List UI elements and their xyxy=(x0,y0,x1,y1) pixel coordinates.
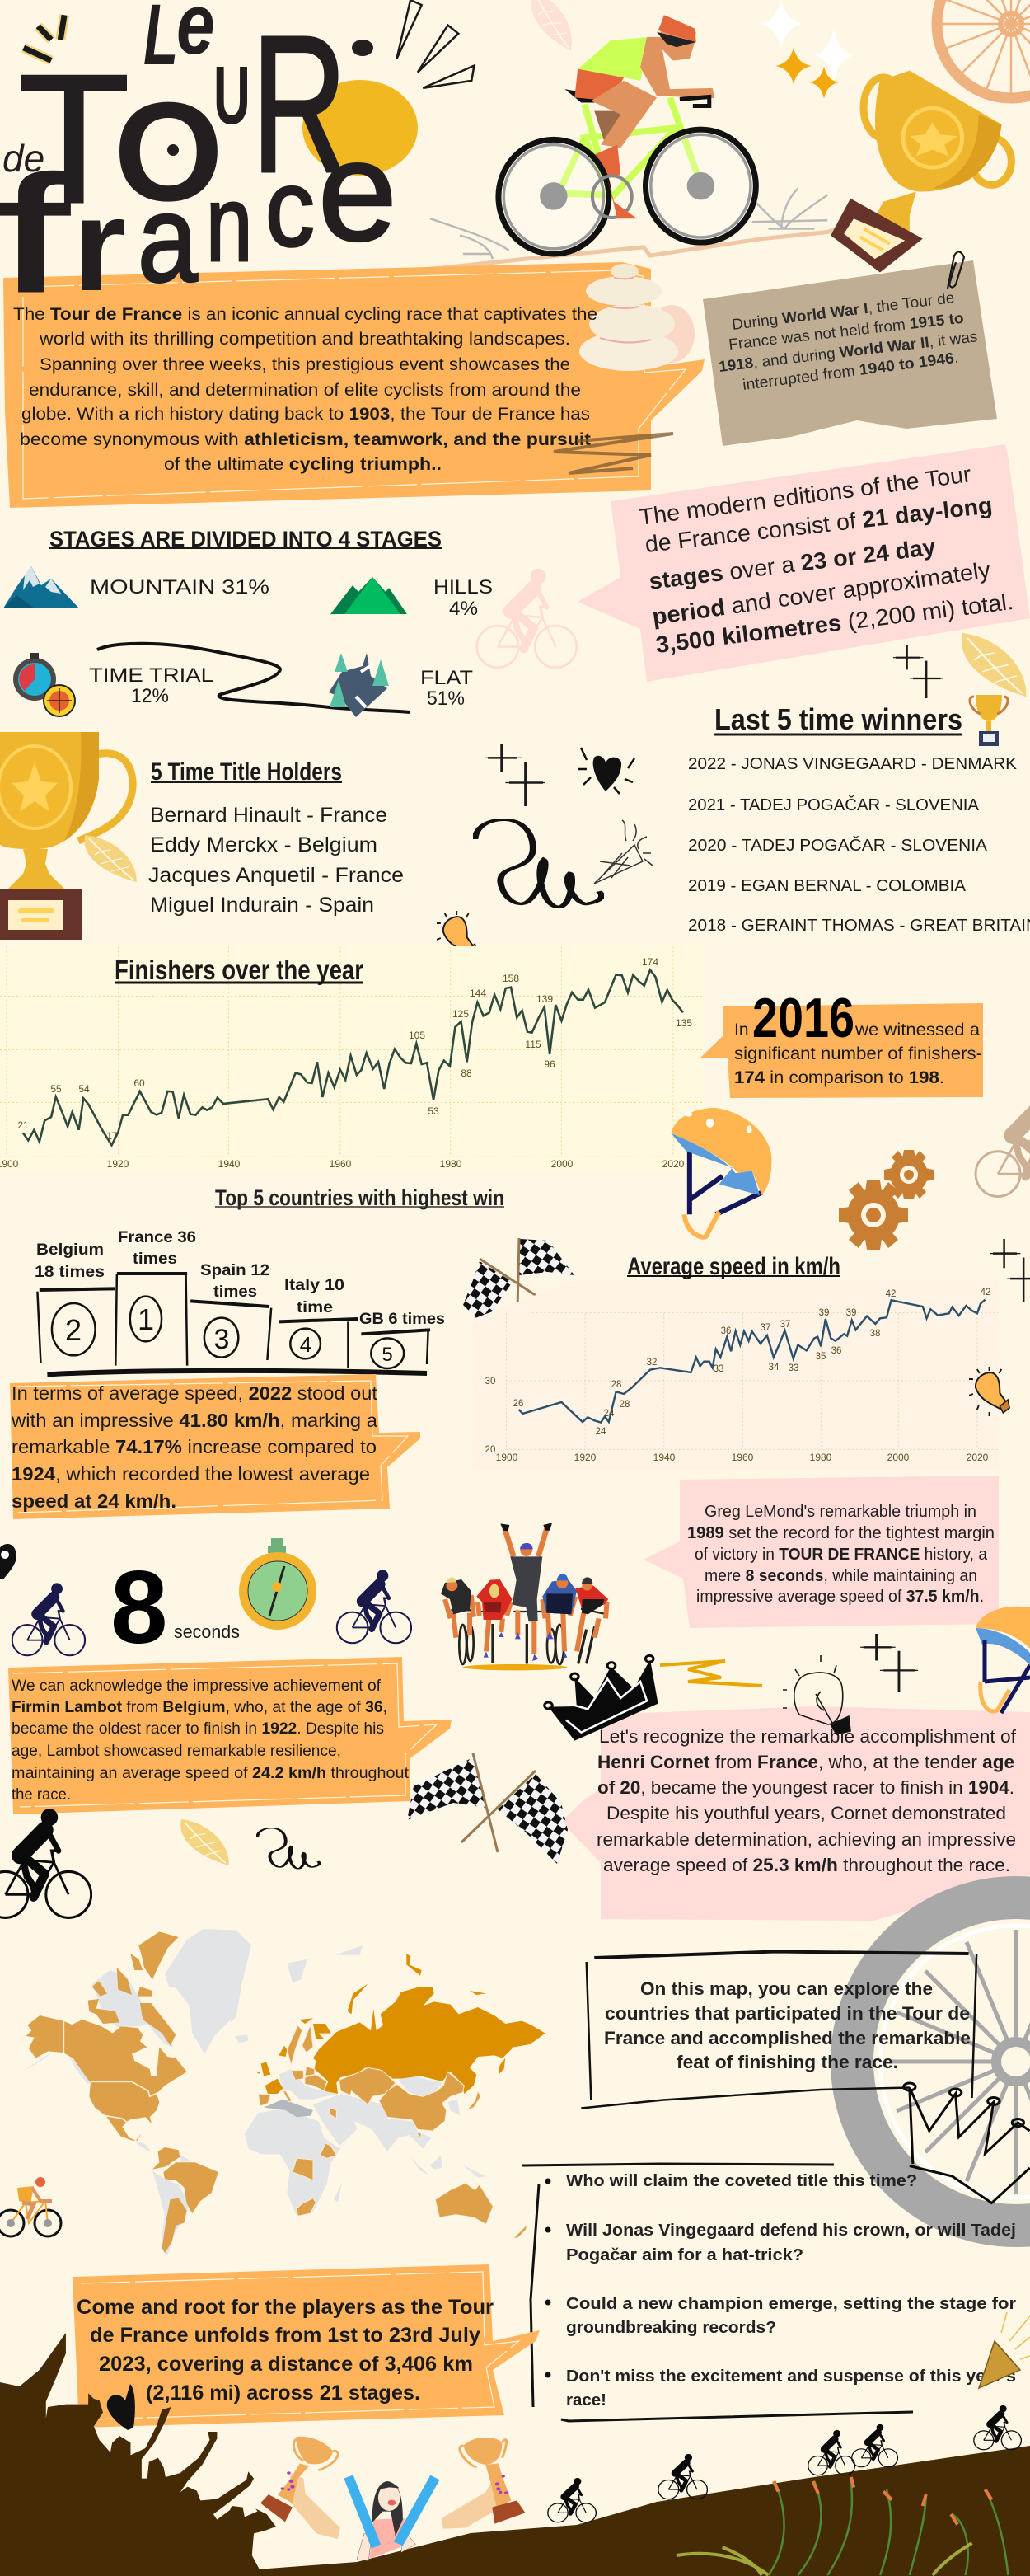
label: time trial: 12% xyxy=(131,685,169,707)
data labels: 55 xyxy=(50,1083,62,1095)
icon: light bulb xyxy=(437,911,476,960)
x axis: 1900 xyxy=(496,1452,518,1463)
intro text: The Tour de France is an iconic annual cycling race that captivates the xyxy=(13,304,597,324)
Cornet text: Henri Cornet from France, who, at the tender age xyxy=(597,1752,1014,1772)
x axis xyxy=(0,1158,685,1170)
podium labels: time xyxy=(297,1299,333,1316)
speed text: speed at 24 km/h. xyxy=(12,1490,176,1512)
Cornet text: average speed of 25.3 km/h throughout the race. xyxy=(603,1855,1010,1875)
illustration: group of cyclists xyxy=(441,1523,608,1670)
data labels: 33 xyxy=(714,1364,723,1374)
panel: Firmin Lambot xyxy=(8,1657,452,1814)
data labels: 28 xyxy=(620,1400,630,1410)
icon: large grey wheel xyxy=(852,1898,1030,2226)
icon: squiggle small xyxy=(257,1828,320,1869)
list: title holders: Eddy Merckx - Belgium xyxy=(150,833,377,856)
callout text: we witnessed a xyxy=(854,1021,980,1039)
modern editions text: period and cover approximately xyxy=(651,557,992,630)
icon: navy cyclist right xyxy=(337,1570,411,1643)
panel: Henri Cornet xyxy=(561,1706,1030,1921)
x axis xyxy=(496,1452,989,1463)
speed text: In terms of average speed, 2022 stood out xyxy=(12,1382,378,1404)
panel: Greg LeMond xyxy=(644,1476,999,1628)
title: France: a xyxy=(138,169,198,307)
callout text xyxy=(604,1978,971,2072)
data labels: 24 xyxy=(596,1427,606,1437)
LeMond text: of victory in TOUR DE FRANCE history, a xyxy=(695,1546,988,1564)
Lambot text xyxy=(12,1677,410,1804)
data labels: 20 xyxy=(485,1445,495,1455)
icon: plus marks xyxy=(860,1634,918,1692)
data labels: 26 xyxy=(513,1399,523,1409)
heading: stages: STAGES ARE DIVIDED INTO 4 STAGES xyxy=(49,527,442,551)
icon: map pin xyxy=(0,1544,16,1579)
dates text: Come and root for the players as the Tour xyxy=(77,2296,494,2319)
icon: black heart xyxy=(107,2384,135,2430)
x axis: 1920 xyxy=(107,1158,129,1170)
data labels xyxy=(17,956,692,1142)
illustration: hero cyclist xyxy=(499,15,756,254)
podium labels: France 36 xyxy=(118,1229,196,1246)
title: Le Tour de: T xyxy=(18,37,130,242)
map: Americas xyxy=(22,1929,251,2256)
list: last winners: 2019 - EGAN BERNAL - COLOMBIA xyxy=(688,876,966,895)
cheering crowd silhouette xyxy=(0,2333,276,2576)
podium labels: times xyxy=(213,1283,257,1301)
icon: gold trophy xyxy=(831,71,1011,272)
Lambot text: We can acknowledge the impressive achievement of xyxy=(12,1677,382,1695)
icon: black crown xyxy=(545,1655,658,1741)
Cornet text xyxy=(597,1726,1017,1875)
heading: title holders: 5 Time Title Holders xyxy=(151,758,342,786)
x axis: 1920 xyxy=(574,1452,597,1463)
LeMond text: 1989 set the record for the tightest margin xyxy=(687,1524,995,1542)
title: Le Tour de xyxy=(2,0,373,242)
icon: outline crown xyxy=(904,2083,1030,2203)
data labels: 135 xyxy=(676,1017,692,1029)
icon: pink leaf xyxy=(523,0,580,51)
icon: helmet xyxy=(672,1108,771,1237)
title: Le Tour de: R xyxy=(251,0,347,213)
icon: large trophy xyxy=(0,732,133,940)
note text: 1918, and during World War II, it was xyxy=(718,327,978,375)
road line and grass tufts xyxy=(391,188,860,272)
data labels: 28 xyxy=(611,1380,621,1390)
data labels: 30 xyxy=(485,1377,495,1387)
note text: During World War I, the Tour de xyxy=(731,289,955,333)
Lambot text: age, Lambot showcased remarkable resilience, xyxy=(12,1742,341,1760)
Lambot text: maintaining an average speed of 24.2 km/h throughout xyxy=(12,1764,410,1782)
data labels: 144 xyxy=(470,988,486,999)
question text: groundbreaking records? xyxy=(566,2319,776,2337)
Lambot text: Firmin Lambot from Belgium, who, at the age of 36, xyxy=(12,1698,387,1716)
x axis: 1960 xyxy=(330,1158,352,1170)
big number: 8 seconds: seconds xyxy=(174,1621,240,1642)
data labels: 158 xyxy=(503,973,519,984)
icon: tan wheel corner xyxy=(937,0,1030,98)
LeMond text: mere 8 seconds, while maintaining an xyxy=(705,1567,977,1585)
icon: pink ghost cyclist xyxy=(477,569,577,668)
podium numbers: 5 xyxy=(382,1344,393,1366)
callout text: France and accomplished the remarkable xyxy=(604,2028,971,2048)
icon: small trophy xyxy=(970,695,1008,746)
list: title holders: Jacques Anquetil - France xyxy=(148,864,404,887)
x axis: 2000 xyxy=(551,1158,574,1170)
icon: squiggle xyxy=(475,819,602,907)
chart: hand-drawn podium xyxy=(35,1229,445,1374)
speed text xyxy=(11,1382,378,1512)
x axis: 1980 xyxy=(440,1158,462,1170)
list: last winners: 2022 - JONAS VINGEGAARD - DENMARK xyxy=(688,754,1017,773)
icon: gold leaf right xyxy=(962,633,1026,697)
podium labels: 18 times xyxy=(35,1264,105,1281)
x axis: 2020 xyxy=(967,1452,989,1463)
rider 3 centre xyxy=(517,1610,534,1654)
dates text xyxy=(77,2296,494,2405)
podium labels: Belgium xyxy=(36,1241,104,1259)
intro text: of the ultimate cycling triumph.. xyxy=(164,454,442,474)
icon: green hills xyxy=(330,577,407,614)
x axis: 1980 xyxy=(810,1452,832,1463)
heading: finishers over the year: Finishers over the year xyxy=(115,955,363,985)
data labels xyxy=(485,1288,990,1455)
list: last winners: 2021 - TADEJ POGAČAR - SLOVENIA xyxy=(688,795,979,814)
Cornet text: of 20, became the youngest racer to finish in 1904. xyxy=(597,1777,1014,1798)
icon: small colored cyclist xyxy=(0,2177,61,2236)
panel: modern editions xyxy=(578,444,1030,682)
speed text: with an impressive 41.80 km/h, marking a xyxy=(11,1410,377,1431)
icon: gold leaf small xyxy=(84,835,137,882)
icon: helmet at edge xyxy=(976,1607,1030,1713)
data labels: 115 xyxy=(525,1039,541,1050)
note text xyxy=(718,289,978,393)
big number: 8 seconds: 8 xyxy=(110,1551,168,1665)
callout text: 174 in comparison to 198. xyxy=(734,1068,944,1087)
map: Eurasia, Africa, Oceania xyxy=(231,1945,545,2238)
icon: plus marks xyxy=(893,645,943,698)
question text: Could a new champion emerge, setting the stage for xyxy=(566,2295,1016,2313)
title: Le Tour de: U xyxy=(213,49,250,142)
podium numbers: 1 xyxy=(138,1302,154,1336)
LeMond text: impressive average speed of 37.5 km/h. xyxy=(696,1588,984,1606)
list: last winners: 2020 - TADEJ POGAČAR - SLOVENIA xyxy=(688,836,987,855)
data labels: 174 xyxy=(642,956,658,968)
rider 5 xyxy=(577,1602,607,1651)
label: time trial: TIME TRIAL xyxy=(89,664,213,687)
icon: road with trees xyxy=(329,653,389,717)
icon: gold party popper xyxy=(979,2312,1030,2388)
x axis: 2020 xyxy=(662,1158,685,1170)
dates text: (2,116 mi) across 21 stages. xyxy=(146,2381,420,2405)
title spark marks xyxy=(24,0,474,88)
Cornet text: Despite his youthful years, Cornet demonstrated xyxy=(606,1803,1006,1823)
data labels: 33 xyxy=(789,1363,798,1373)
data labels: 42 xyxy=(981,1288,990,1297)
callout text: countries that participated in the Tour de xyxy=(605,2003,970,2024)
label: flat: FLAT xyxy=(420,667,473,689)
question text: Who will claim the coveted title this time? xyxy=(566,2172,917,2190)
podium numbers xyxy=(65,1302,393,1366)
data labels: 88 xyxy=(461,1067,472,1079)
data labels: 17 xyxy=(106,1130,118,1142)
podium numbers: 2 xyxy=(65,1313,82,1347)
modern editions text: stages over a 23 or 24 day xyxy=(648,533,938,594)
icon: stopwatch and target xyxy=(13,653,75,716)
question text: Pogačar aim for a hat-trick? xyxy=(566,2246,803,2264)
title: France: c xyxy=(265,146,315,269)
data labels: 37 xyxy=(761,1323,770,1333)
icon: crossed checkered flags xyxy=(407,1753,568,1864)
podium labels xyxy=(35,1229,445,1328)
data labels: 39 xyxy=(846,1308,856,1318)
podium labels: times xyxy=(133,1250,177,1268)
data labels: 125 xyxy=(452,1008,469,1020)
data labels: 42 xyxy=(886,1289,896,1299)
label: hills xyxy=(433,576,493,620)
icon: blue mountain xyxy=(3,566,79,608)
choropleth world map xyxy=(22,1929,545,2256)
label: flat: 51% xyxy=(427,687,465,710)
icon: tan cyclist at right edge xyxy=(976,1090,1030,1197)
modern editions text: de France consist of 21 day-long xyxy=(644,492,994,557)
x axis: 1940 xyxy=(653,1452,676,1463)
callout text: feat of finishing the race. xyxy=(677,2052,898,2072)
callout: map explanation xyxy=(581,1952,976,2109)
orange scribble xyxy=(660,1661,762,1686)
list: title holders xyxy=(148,804,404,917)
icon: gold stopwatch xyxy=(239,1538,316,1630)
panel: kraft note on World Wars xyxy=(703,251,997,446)
rider 1 xyxy=(445,1595,474,1638)
line chart: average speed xyxy=(473,1279,999,1470)
icon: gold leaf xyxy=(180,1819,229,1865)
LeMond text: Greg LeMond's remarkable triumph in xyxy=(705,1503,976,1521)
icon: stacked stones xyxy=(579,264,695,371)
data labels: 139 xyxy=(536,993,553,1005)
dates text: 2023, covering a distance of 3,406 km xyxy=(99,2353,473,2376)
list: last winners xyxy=(688,754,1030,935)
icon: gears xyxy=(839,1150,934,1250)
podium labels: GB 6 times xyxy=(359,1311,445,1328)
title: Le Tour de: de xyxy=(2,137,44,180)
LeMond text xyxy=(687,1503,995,1606)
icon: heart with rays xyxy=(578,748,634,794)
title: France: n xyxy=(206,163,252,284)
dates text: de France unfolds from 1st to 23rd July xyxy=(90,2324,480,2347)
podium labels: Italy 10 xyxy=(284,1277,344,1294)
callout text: 2016 xyxy=(752,987,854,1049)
line chart: finishers xyxy=(0,946,703,1171)
list: title holders: Bernard Hinault - France xyxy=(150,804,387,827)
icon: orange bulb xyxy=(969,1367,1009,1416)
modern editions text xyxy=(638,461,1014,658)
label: mountain: MOUNTAIN 31% xyxy=(90,576,269,598)
grass tufts xyxy=(677,2477,1008,2575)
heading: top 5 countries: Top 5 countries with highest win xyxy=(215,1185,504,1210)
callout text: In xyxy=(734,1021,749,1039)
speed text: remarkable 74.17% increase compared to xyxy=(12,1436,377,1457)
panel: average speed text xyxy=(10,1374,420,1519)
podium numbers: 3 xyxy=(214,1324,229,1355)
data labels: 36 xyxy=(721,1326,731,1336)
data labels: 21 xyxy=(17,1119,29,1131)
icon: black cyclist xyxy=(0,1809,91,1917)
icons: silhouette cyclists on hill xyxy=(548,2405,1021,2522)
data labels: 96 xyxy=(544,1058,555,1070)
label: time trial xyxy=(89,664,213,707)
callout text xyxy=(734,987,982,1087)
icon: plus marks xyxy=(485,744,545,806)
list: title holders: Miguel Indurain - Spain xyxy=(150,894,374,917)
bullets xyxy=(545,2178,550,2377)
panel: questions list xyxy=(522,2164,1016,2421)
title: France: e xyxy=(318,112,397,270)
intro text: globe. With a rich history dating back to 1903, the Tour de France has xyxy=(21,404,590,424)
data labels: 37 xyxy=(780,1320,790,1330)
intro text: become synonymous with athleticism, teamwork, and the pursuit xyxy=(20,429,591,449)
icon: hand with trophy left xyxy=(260,2437,340,2539)
callout text: On this map, you can explore the xyxy=(640,1978,933,1999)
question text: Will Jonas Vingegaard defend his crown, or will Tadej xyxy=(566,2222,1016,2240)
data line xyxy=(519,1300,986,1423)
question text: race! xyxy=(566,2391,606,2409)
data labels: 53 xyxy=(428,1105,439,1117)
intro text xyxy=(13,304,597,474)
Cornet text: remarkable determination, achieving an impressive xyxy=(597,1829,1016,1850)
rider 4 xyxy=(542,1597,575,1651)
modern editions text: The modern editions of the Tour xyxy=(638,461,972,530)
Cornet text: Let's recognize the remarkable accomplishment of xyxy=(599,1726,1017,1747)
modern editions text: 3,500 kilometres (2,200 mi) total. xyxy=(654,589,1014,658)
podium labels: Spain 12 xyxy=(200,1262,269,1279)
rider 2 xyxy=(478,1602,511,1651)
speed text: 1924, which recorded the lowest average xyxy=(12,1463,370,1485)
icon: paperclip xyxy=(948,251,964,289)
data labels: 60 xyxy=(133,1077,145,1089)
data labels: 39 xyxy=(819,1308,829,1318)
big number: 8 seconds xyxy=(110,1551,240,1665)
data labels: 36 xyxy=(831,1346,841,1356)
title: France xyxy=(0,112,397,326)
data labels: 35 xyxy=(816,1352,826,1362)
data labels: 38 xyxy=(870,1329,880,1339)
data labels: 32 xyxy=(647,1358,657,1368)
icon: checkered flags xyxy=(463,1238,574,1325)
brown scribble xyxy=(554,434,673,473)
data labels: 34 xyxy=(769,1363,780,1372)
label: hills: HILLS xyxy=(433,576,493,598)
data line xyxy=(23,970,683,1145)
note text: France was not held from 1915 to xyxy=(728,309,965,353)
icon: party popper xyxy=(594,820,653,884)
icon: sparkles xyxy=(760,0,854,99)
data labels: 105 xyxy=(409,1030,425,1041)
x axis: 2000 xyxy=(887,1452,910,1463)
winding line xyxy=(97,644,410,712)
Lambot text: the race. xyxy=(12,1785,71,1804)
label: hills: 4% xyxy=(449,598,478,620)
icon: hand with trophy right xyxy=(442,2438,525,2529)
note text: interrupted from 1940 to 1946. xyxy=(742,349,959,393)
icon: navy cyclist left xyxy=(12,1583,85,1655)
title: France: r xyxy=(73,171,126,318)
intro text: Spanning over three weeks, this prestigious event showcases the xyxy=(40,354,570,374)
x axis: 1940 xyxy=(218,1158,241,1170)
hillside ground xyxy=(247,2446,1030,2576)
icon: plus marks at edge xyxy=(990,1239,1030,1302)
list: last winners: 2018 - GERAINT THOMAS - GREAT BRITAIN xyxy=(688,916,1030,935)
intro text: endurance, skill, and determination of elite cyclists from around the xyxy=(29,380,581,400)
x axis: 1960 xyxy=(732,1452,754,1463)
question text: Don't miss the excitement and suspense of this year's xyxy=(566,2367,1016,2386)
question text xyxy=(566,2172,1016,2409)
icon: outline bulb xyxy=(783,1655,850,1734)
data labels: 54 xyxy=(78,1083,90,1095)
panel: 2016 callout xyxy=(700,987,983,1098)
title: Le Tour de: O xyxy=(114,73,223,231)
heading: last 5 time winners: Last 5 time winners xyxy=(714,702,962,736)
panel: race dates xyxy=(73,2264,540,2428)
callout text: significant number of finishers- xyxy=(734,1044,982,1063)
data labels: 24 xyxy=(604,1409,615,1419)
heading: average speed: Average speed in km/h xyxy=(627,1253,840,1280)
Lambot text: became the oldest racer to finish in 1922. Despite his xyxy=(12,1720,384,1738)
label: flat xyxy=(420,667,473,710)
sun disc xyxy=(302,80,418,176)
panel: intro xyxy=(3,262,705,508)
intro text: world with its thrilling competition and breathtaking landscapes. xyxy=(39,329,570,349)
podium numbers: 4 xyxy=(300,1332,311,1357)
illustration: girl with cheer sticks xyxy=(344,2475,439,2561)
